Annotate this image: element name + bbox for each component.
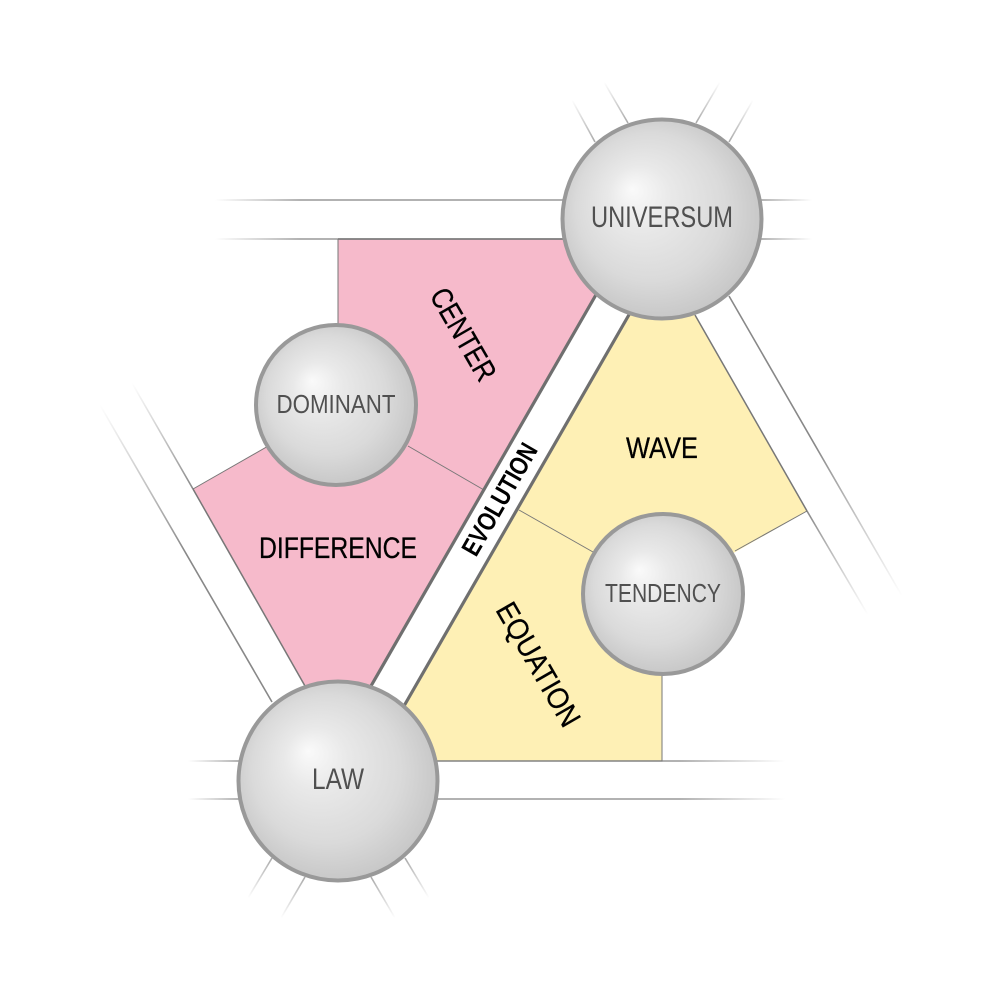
sphere: law: LAW bbox=[312, 763, 365, 796]
sphere: tendency: TENDENCY bbox=[605, 578, 721, 608]
label: center: CENTER bbox=[423, 282, 502, 387]
evolution band edges bbox=[371, 293, 630, 706]
label: evolution: EVOLUTION bbox=[455, 438, 544, 561]
sphere: tendency bbox=[583, 514, 743, 674]
sphere: universum bbox=[562, 120, 762, 318]
label: wave: WAVE bbox=[626, 432, 698, 465]
label: equation: EQUATION bbox=[489, 597, 586, 733]
horizontal and diagonal guide lines bbox=[100, 82, 902, 918]
sphere: dominant: DOMINANT bbox=[276, 389, 396, 419]
sphere: universum: UNIVERSUM bbox=[591, 201, 733, 234]
sphere: dominant bbox=[256, 325, 416, 485]
sphere: law bbox=[238, 682, 438, 880]
panel: pink region bbox=[193, 239, 640, 720]
panel: yellow region bbox=[404, 313, 807, 761]
label: difference: DIFFERENCE bbox=[259, 532, 417, 565]
panel outlines bbox=[193, 239, 807, 761]
